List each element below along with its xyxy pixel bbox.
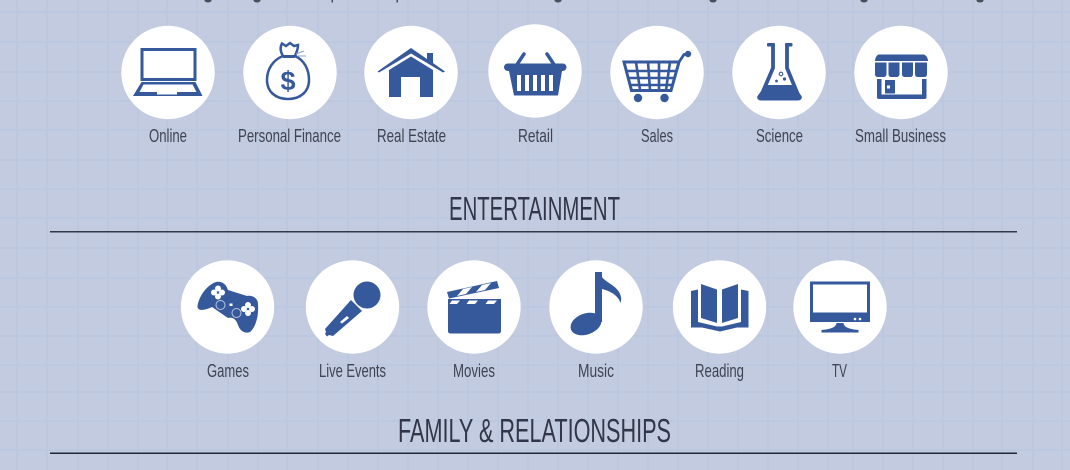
- category: Sales: [610, 26, 704, 146]
- category: Live Events: [306, 260, 399, 381]
- category: TV: [793, 260, 887, 381]
- label: Reading: [695, 360, 744, 381]
- category: Music: [549, 260, 643, 381]
- icon: microphone: [325, 282, 380, 336]
- category: Real Estate: [364, 26, 458, 146]
- icon: laptop: [133, 48, 202, 96]
- heading: Entertainment: ENTERTAINMENT: [449, 191, 620, 228]
- label: Retail: [518, 125, 553, 146]
- icon: basket: [504, 54, 566, 96]
- icon: house: [378, 48, 445, 97]
- icon: money bag: $: [280, 66, 296, 96]
- label: Science: [756, 125, 803, 146]
- category: Science: [732, 26, 826, 146]
- icon: music note: [567, 272, 621, 339]
- category: Online: [121, 26, 215, 146]
- label: Personal Finance: [238, 125, 341, 146]
- label: Live Events: [319, 360, 386, 381]
- label: Small Business: [855, 125, 946, 146]
- icon: open book: [691, 284, 748, 332]
- category: Personal Finance: [238, 26, 341, 146]
- heading: Family & Relationships: FAMILY & RELATIONSHIPS: [398, 413, 671, 450]
- label: Real Estate: [377, 125, 446, 146]
- category: Games: [181, 260, 274, 381]
- label: Games: [207, 360, 249, 381]
- icon: clapperboard: [447, 281, 501, 334]
- icon: television: [810, 282, 870, 332]
- icon: flask: [757, 43, 802, 100]
- clipped intro text descenders: [204, 0, 984, 2]
- label: Movies: [453, 360, 495, 381]
- category: Reading: [673, 260, 766, 381]
- icon: storefront: [875, 54, 928, 99]
- icon: shopping cart: [624, 51, 691, 102]
- label: Online: [149, 125, 187, 146]
- label: Sales: [641, 125, 673, 146]
- category: Movies: [427, 260, 521, 381]
- label: TV: [832, 360, 847, 381]
- category: Small Business: [854, 26, 948, 146]
- icon: game controller: [197, 282, 258, 333]
- label: Music: [578, 360, 614, 381]
- category: Retail: [488, 24, 582, 146]
